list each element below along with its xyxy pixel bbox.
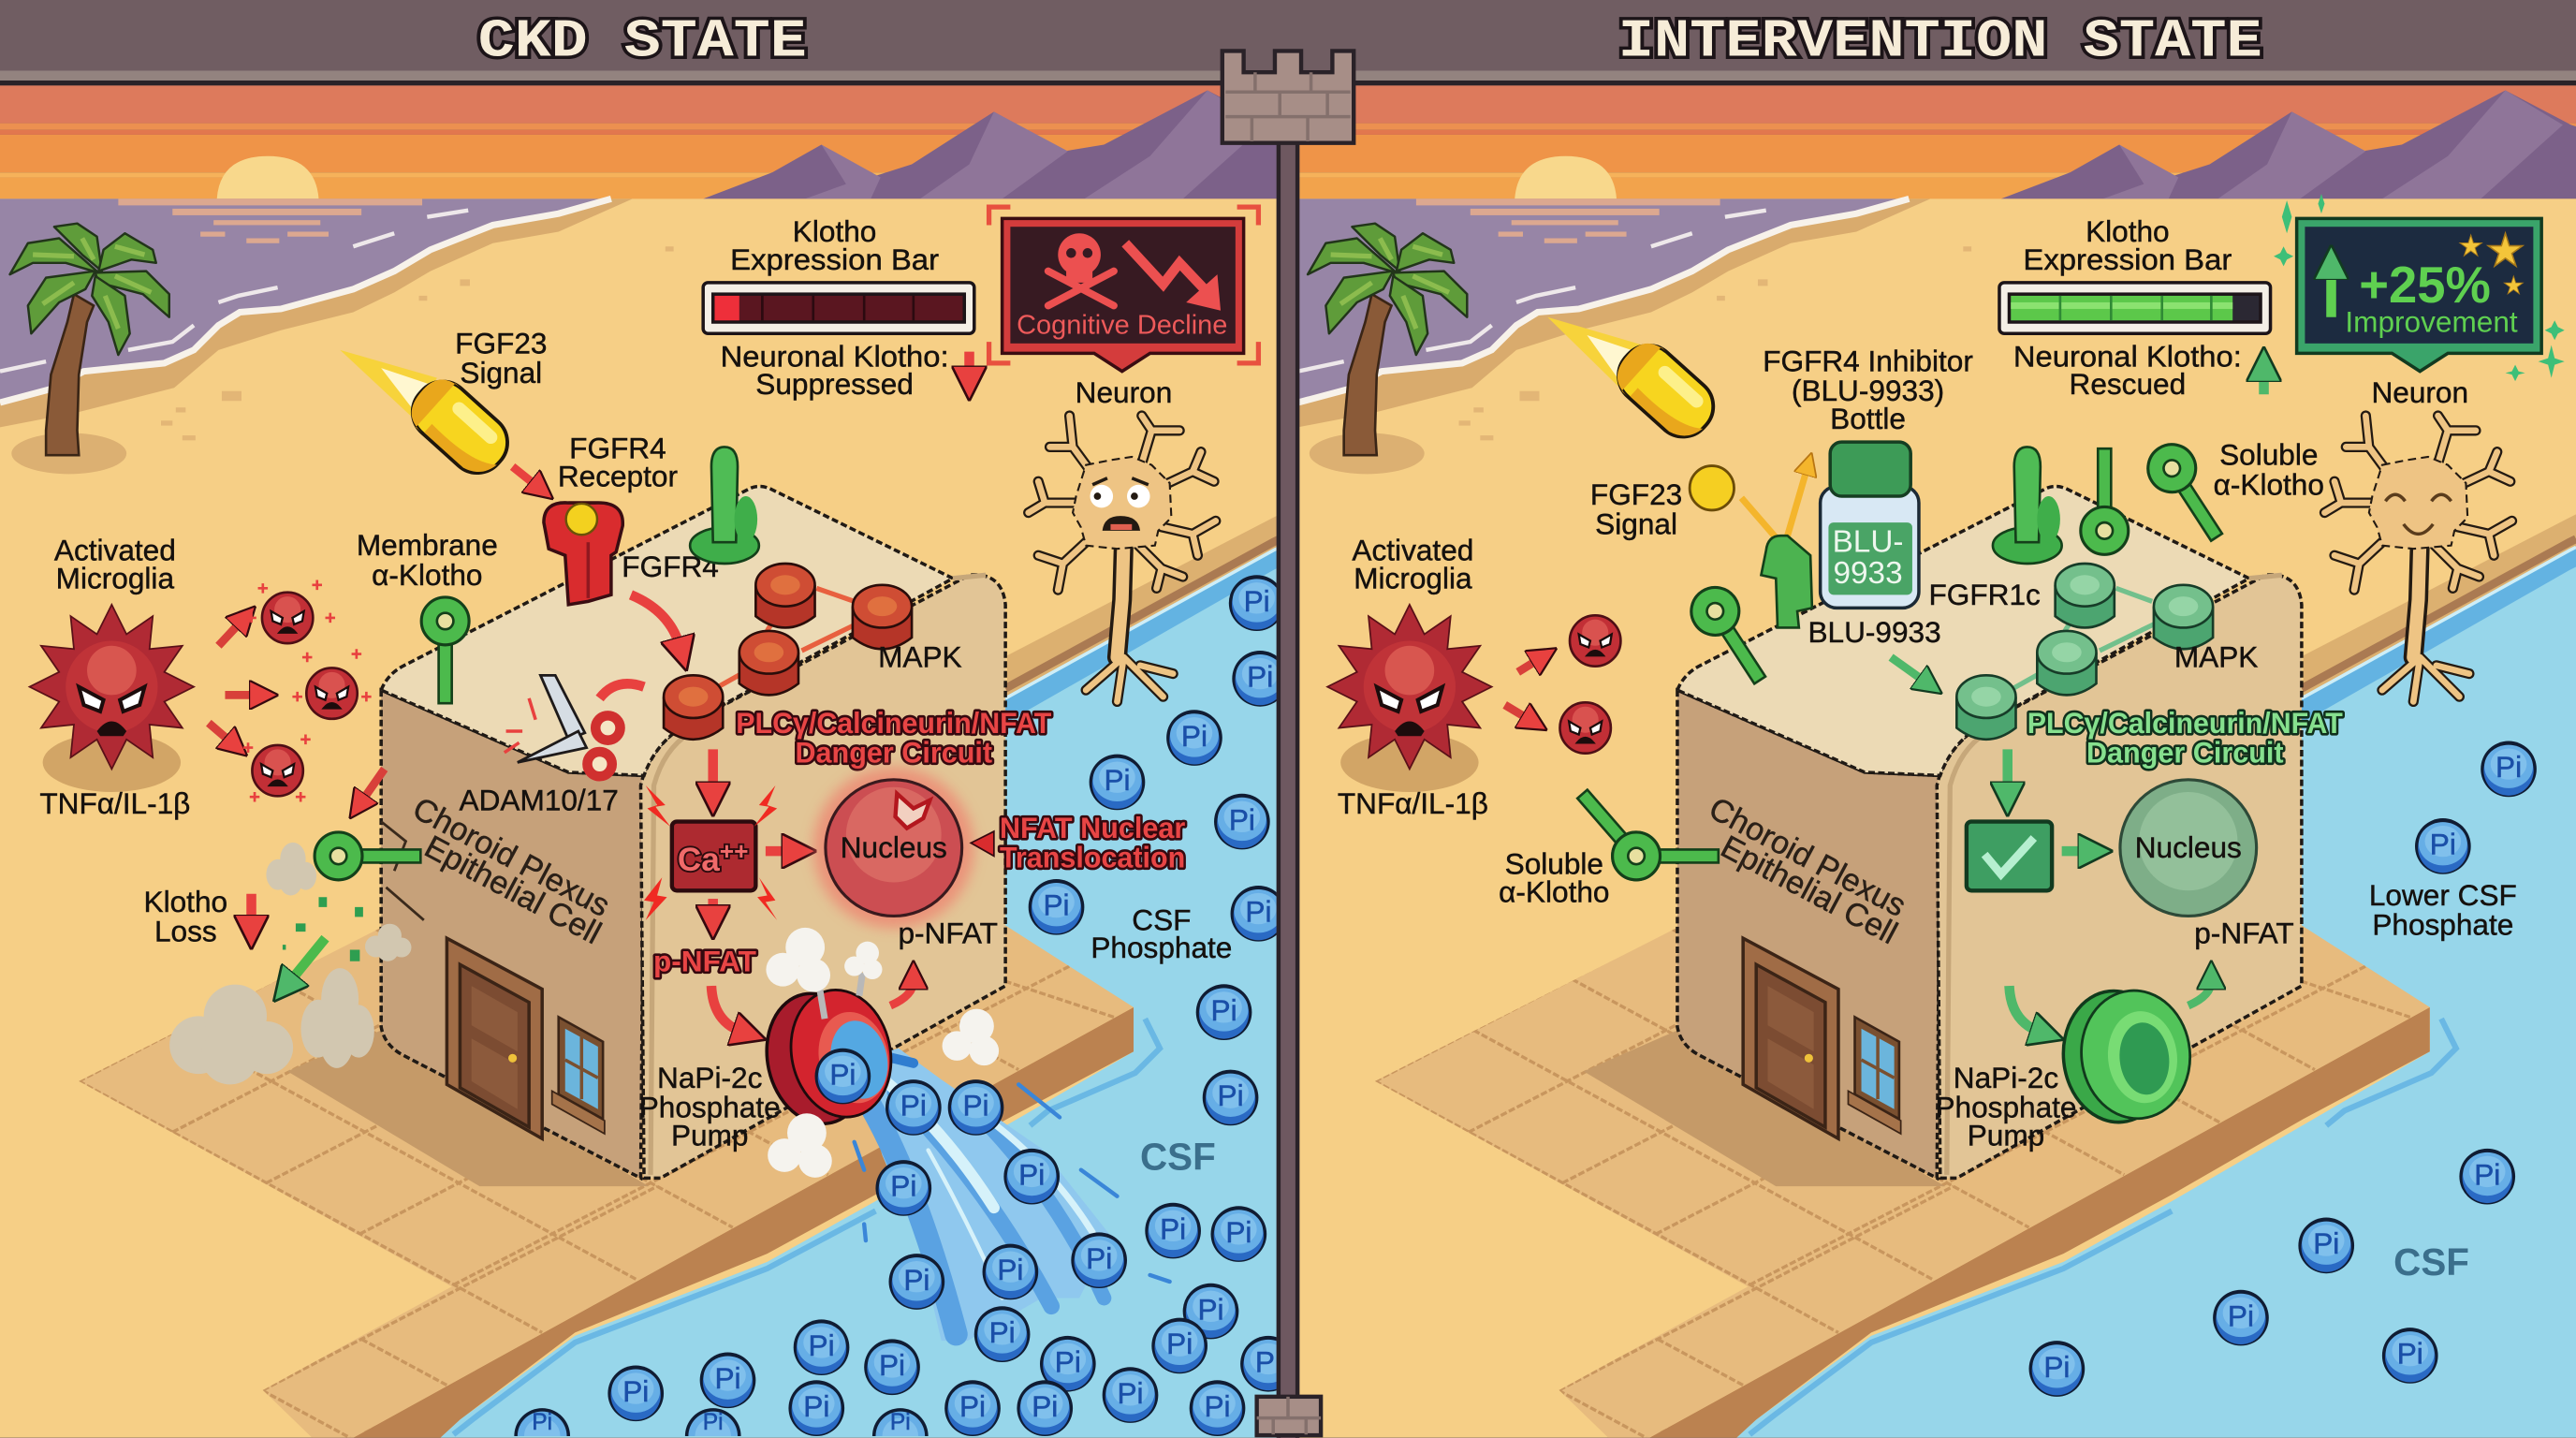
pump label: Phosphate [1935,1090,2076,1123]
header bar [0,0,2576,85]
roof key [2081,448,2129,554]
phosphate coins: Pi [2496,750,2522,784]
green receptor on roof [690,447,759,564]
arrow to check box [2005,749,2011,792]
arrow to MAPK [1891,657,1925,682]
neuronal Klotho suppressed [721,339,970,401]
phosphate coins: Pi [2430,828,2456,861]
FGFR1c label: FGFR1c [1929,578,2041,611]
lightning bolts [644,785,777,920]
MAPK cascade [664,564,912,740]
deflected yellow arrow [1741,468,1808,547]
phosphate coins: Pi [809,1328,835,1362]
p-NFAT red: p-NFAT [653,944,756,977]
circuit label: PLCγ/Calcineurin/NFAT [2027,706,2343,740]
Ca++ box: ++ [720,837,749,865]
sparkles [2274,194,2565,381]
Klotho expression bar heading: Klotho [2086,214,2170,248]
FGFR4 receptor label: FGFR4 [569,432,666,465]
phosphate coins [2029,741,2537,1397]
MAPK label: MAPK [878,640,962,674]
reduced cytokine arrows [1505,659,1540,720]
tiled platform [1375,827,2430,1438]
activated microglia label: Microglia [1354,561,1472,594]
phosphate coins: Pi [1032,1389,1058,1423]
phosphate coins: Pi [879,1348,905,1382]
FGF23 ball [1690,466,1734,510]
nucleus calm: Nucleus [2135,830,2242,864]
pump label [1935,1061,2076,1152]
phosphate coins: Pi [2313,1226,2339,1260]
phosphate coins: Pi [959,1389,986,1423]
soluble klotho label: Soluble [1505,847,1603,881]
check box [1967,822,2052,890]
lower CSF phosphate label: Lower CSF [2369,878,2517,912]
CSF phosphate label [1090,902,1232,964]
neuron label: Neuron [1076,375,1172,409]
NFAT translocation label: NFAT Nuclear [1000,811,1185,844]
soluble klotho label [2214,438,2324,501]
small microglia [243,580,372,801]
NaPi-2c pump red [755,979,903,1133]
Klotho expression bar heading: Expression Bar [2023,242,2232,276]
phosphate coins: Pi [1229,802,1255,836]
NFAT translocation label: Translocation [1000,841,1185,874]
phosphate coins: Pi [1055,1345,1081,1379]
phosphate coins [514,575,1296,1436]
phosphate coins: Pi [1225,1215,1251,1249]
activated microglia label: Microglia [56,561,174,594]
arrow to Ca [710,749,716,792]
curved arrow to pump [2009,986,2041,1032]
microglia large [30,605,194,792]
phosphate coins: Pi [803,1389,829,1423]
phosphate coins: Pi [1043,888,1070,922]
shed klotho key [315,832,420,880]
cell label: Choroid Plexus [407,791,615,924]
klotho loss label [144,885,252,948]
soluble klotho key top-left [1682,579,1779,693]
phosphate coins: Pi [1181,719,1208,753]
callout: cognitive decline [989,207,1258,372]
activated microglia label: Activated [54,533,176,566]
CSF phosphate label: Phosphate [1090,931,1232,964]
soluble klotho label: Soluble [2219,438,2318,472]
callout: +25% improvement [2297,218,2541,372]
FGFR4 red receptor [544,503,622,605]
phosphate coins: Pi [714,1361,741,1395]
sunset sky with sun and mountains [0,85,1278,200]
p-NFAT label: p-NFAT [2194,916,2294,949]
panel: Intervention state (right) [1298,85,2576,1438]
pump label: Phosphate [639,1090,781,1123]
phosphate coins: Pi [989,1315,1016,1349]
BLU-9933 bottle [1821,442,1919,608]
phosphate coins: Pi [1247,660,1273,694]
phosphate coins: Pi [622,1374,649,1408]
neuron label: Neuron [2371,375,2468,409]
curved arrow to pump [711,986,742,1032]
Klotho expression bar heading: Expression Bar [730,242,939,276]
Klotho expression bar heading [730,214,939,276]
neuronal Klotho rescued: Neuronal Klotho: [2013,339,2242,373]
TNF label: TNFα/IL-1β [39,786,190,820]
nucleus glowing: Nucleus [841,830,947,864]
phosphate coins: Pi [2474,1157,2500,1191]
divider tower top [1222,51,1354,143]
arrow FGFR4 to MAPK [631,594,681,648]
phosphate coins: Pi [962,1089,989,1123]
sand background [0,198,1278,1438]
central divider pole [1277,98,1299,1438]
purple sea and foam [0,198,674,440]
title: intervention state: INTERVENTION STATE [1618,12,2262,73]
callout: +25% improvement: +25% [2359,257,2491,314]
soluble klotho key [1564,778,1719,889]
membrane klotho label: α-Klotho [372,558,482,592]
phosphate coins: Pi [1255,1345,1281,1379]
green loss arrow [289,938,326,983]
phosphate coins: Pi [1245,895,1271,929]
phosphate coins: Pi [903,1263,929,1297]
dust clouds [169,843,411,1084]
FGFR4 inhibitor bottle label: Bottle [1830,402,1906,435]
choroid plexus epithelial cell building [381,487,1005,1178]
soluble klotho label: α-Klotho [2214,467,2324,501]
Klotho expression bar heading: Klotho [793,214,876,248]
phosphate coins: Pi [890,1410,911,1435]
cell label: Choroid Plexus [1703,791,1911,924]
phosphate coins: Pi [1244,584,1270,618]
FGF23 signal label: Signal [460,356,542,389]
activated microglia label [54,533,176,594]
FGF23 signal label: FGF23 [1590,477,1682,511]
FGF23 signal label [457,333,547,389]
BLU-9933 bottle: 9933 [1833,556,1903,591]
phosphate coins: Pi [829,1057,856,1091]
pump label [639,1061,781,1152]
pump label: Pump [1968,1118,2044,1152]
Ca++ box: Ca [678,842,720,878]
phosphate coins: Pi [703,1410,724,1435]
phosphate coins: Pi [2397,1337,2423,1371]
circuit label: Danger Circuit [2086,735,2284,769]
callout: +25% improvement: Improvement [2345,305,2518,339]
phosphate coins: Pi [1086,1241,1112,1275]
MAPK label: MAPK [2174,640,2258,674]
FGFR4 receptor label [560,438,678,492]
soluble klotho label [1499,847,1609,909]
BLU-9933 label: BLU-9933 [1808,615,1941,649]
phosphate coins: Pi [1160,1211,1186,1245]
neuronal Klotho rescued [2013,339,2264,401]
palm tree [10,224,169,474]
circuit label [2027,706,2343,769]
FGFR4 receptor label: Receptor [558,460,678,493]
arrow to receptor [513,466,537,487]
scissors ADAM10/17 [505,675,644,776]
neuron happy [2324,416,2512,701]
phosphate coins: Pi [1218,1078,1244,1112]
small microglia [1559,615,1620,754]
membrane klotho key [421,597,469,703]
FGF23 capsule with flame [1547,317,1725,448]
cell label: Epithelial Cell [1715,829,1903,951]
klotho loss label: Loss [154,915,217,948]
CSF water [440,514,1280,1438]
nucleus calm [2120,780,2257,916]
microglia large [1327,605,1492,792]
phosphate coins: Pi [1018,1157,1045,1191]
Klotho bar low [703,283,974,333]
membrane klotho label: Membrane [357,528,498,562]
FGF23 signal label: FGF23 [455,326,547,360]
circuit label [736,706,1051,769]
palm tree [1308,224,1467,474]
Ca++ box [672,822,755,890]
curved arrow out of pump [2188,981,2211,1005]
panel: CKD state (left) [0,85,1296,1438]
cytokine arrows [209,621,385,801]
phosphate coins: Pi [890,1169,916,1203]
phosphate coins: Pi [1104,763,1131,797]
neuron sad [1029,416,1216,701]
cell label: Epithelial Cell [418,829,607,951]
roof receptor [1993,447,2062,564]
water burst [855,1049,1170,1341]
divider tower base [1257,1397,1321,1435]
blocked receptor [1761,536,1812,627]
circuit label: PLCγ/Calcineurin/NFAT [736,706,1051,740]
phosphate coins: Pi [2228,1299,2254,1332]
neuronal Klotho suppressed: Suppressed [755,367,914,401]
sunset sky with sun and mountains [1298,85,2576,200]
neuronal Klotho suppressed: Neuronal Klotho: [721,339,949,373]
CSF label: CSF [2393,1240,2469,1284]
pump label: Pump [671,1118,748,1152]
FGFR4 inhibitor bottle label: (BLU-9933) [1792,374,1944,407]
phosphate coins: Pi [1117,1376,1144,1410]
nucleus glowing [813,768,974,929]
arrow Ca to p-NFAT [710,899,716,916]
curved arrow out of pump [890,981,914,1005]
CSF label: CSF [1140,1136,1216,1179]
FGF23 signal label [1590,477,1682,540]
TNF label: TNFα/IL-1β [1338,786,1488,820]
CSF water [1736,514,2576,1438]
activated microglia label [1352,533,1473,594]
FGFR4 label inside: FGFR4 [622,550,719,583]
soluble klotho label: α-Klotho [1499,875,1609,909]
BLU-9933 bottle: BLU- [1833,525,1904,560]
Klotho bar high [1999,283,2271,333]
FGF23 capsule with flame [341,350,509,475]
lower CSF phosphate label [2369,878,2517,942]
green fragments [283,897,363,961]
free soluble key [2139,435,2236,550]
phosphate coins: Pi [997,1253,1023,1286]
circuit label: Danger Circuit [795,735,993,769]
arrow to nucleus [2062,848,2088,854]
ADAM label: ADAM10/17 [460,783,619,816]
phosphate coins: Pi [1166,1327,1193,1360]
NFAT translocation label [971,811,1185,874]
sand background [1298,198,2576,1438]
phosphate coins: Pi [1211,993,1237,1027]
phosphate coins: Pi [1204,1389,1231,1423]
callout: cognitive decline: Cognitive Decline [1017,310,1227,340]
p-NFAT black: p-NFAT [898,916,998,949]
NaPi-2c pump green [2056,984,2197,1127]
membrane klotho label [359,534,497,586]
purple sea and foam [1298,198,1971,440]
FGF23 signal label: Signal [1595,506,1677,540]
choroid plexus epithelial cell building [1677,487,2302,1178]
phosphate coins: Pi [900,1089,927,1123]
lower CSF phosphate label: Phosphate [2372,908,2513,942]
CSF phosphate label: CSF [1132,902,1191,936]
wall cracks [381,822,424,920]
phosphate coins: Pi [2043,1350,2070,1384]
FGFR4 inhibitor bottle label: FGFR4 Inhibitor [1763,345,1973,378]
pump label: NaPi-2c [657,1061,762,1094]
arrow Ca to nucleus [766,848,792,854]
tiled platform [79,925,1134,1438]
title: CKD state: CKD STATE [478,12,807,73]
pump puffs [766,928,999,1178]
neuronal Klotho rescued: Rescued [2070,367,2186,401]
phosphate coins: Pi [1197,1292,1224,1326]
pump label: NaPi-2c [1954,1061,2058,1094]
activated microglia label: Activated [1352,533,1473,566]
FGFR4 inhibitor bottle label [1763,345,1973,435]
Klotho expression bar heading [2023,214,2232,276]
phosphate coins: Pi [532,1410,552,1435]
MAPK cascade [1956,564,2213,740]
klotho loss label: Klotho [144,885,227,918]
